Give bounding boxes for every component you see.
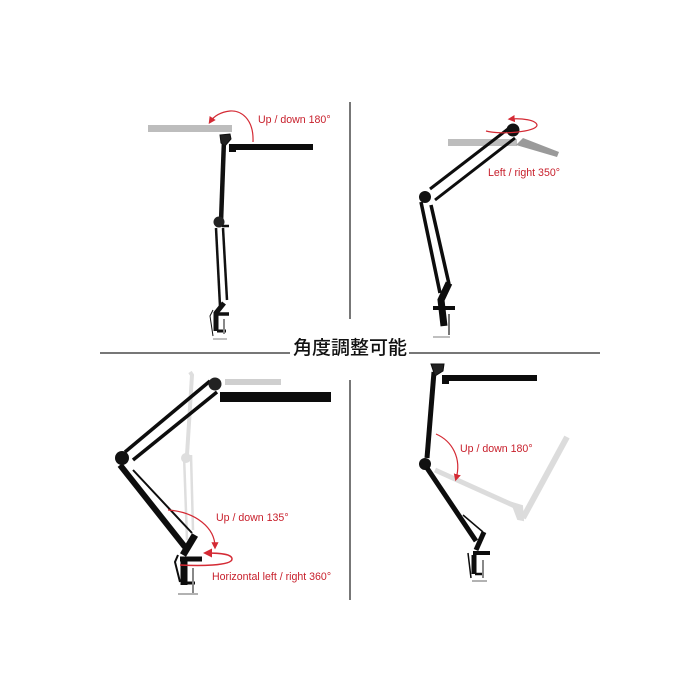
- vertical divider bottom: [349, 380, 351, 600]
- lamp head: [516, 138, 559, 157]
- label horizontal: Horizontal left / right 360°: [212, 571, 331, 583]
- arrow: up/down arc: [168, 510, 215, 547]
- arrow: up/down arc: [436, 434, 458, 479]
- label up/down: Up / down 135°: [216, 512, 289, 524]
- lamp arm: [419, 364, 490, 581]
- lamp head: [220, 392, 331, 402]
- panel: lamp left/right 350: [419, 119, 560, 337]
- label: Up / down 180°: [258, 114, 331, 126]
- label: Up / down 180°: [460, 443, 533, 455]
- lamp head: [229, 144, 313, 152]
- ghost lamp: [181, 372, 281, 540]
- lamp head: [442, 375, 537, 384]
- heading: 角度調整可能: [293, 337, 407, 359]
- arrow: horizontal ellipse: [180, 553, 232, 565]
- label: Left / right 350°: [488, 167, 560, 179]
- vertical divider top: [349, 102, 351, 319]
- lamp arm: [210, 134, 231, 339]
- ghost arm: [435, 437, 567, 520]
- ghost lamp head: [448, 139, 517, 146]
- arrow: up/down arc: [210, 111, 253, 142]
- panel: lamp up/down 180 top: [148, 111, 331, 339]
- horizontal divider left: [100, 352, 290, 354]
- panel: lamp up/down 135 and horizontal 360: [115, 372, 331, 594]
- horizontal divider right: [409, 352, 600, 354]
- panel: lamp up/down 180 bottom: [419, 364, 567, 581]
- ghost lamp head: [148, 125, 232, 132]
- lamp arm: [115, 378, 222, 594]
- arrow: left/right ellipse: [486, 119, 537, 133]
- lamp arm: [419, 124, 520, 337]
